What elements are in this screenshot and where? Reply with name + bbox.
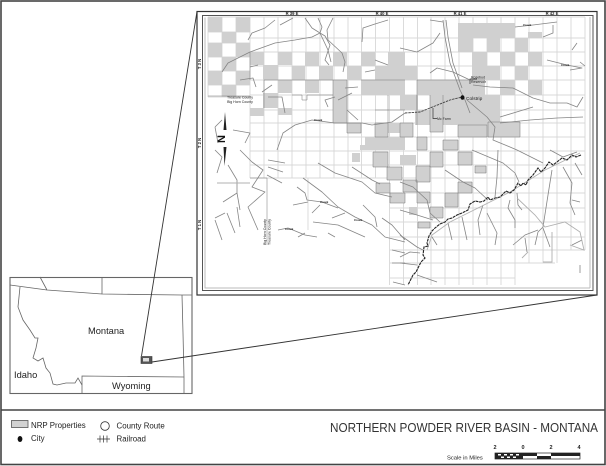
legend: NRP properties [12,420,86,430]
range labels: R 40 E [376,11,389,16]
creek labels: Creek [561,63,570,67]
creek labels: Creek [285,227,294,231]
state borders [10,277,192,393]
city: Colstrip [460,95,483,102]
township labels: T 3 N [197,59,202,69]
legend: railroad [97,434,146,444]
county boundary label: Big Horn County [227,100,253,104]
panel: Montana locator map [10,277,192,394]
label: Rosebud Reservoir [470,76,487,84]
township labels: T 2 N [197,138,202,148]
label: McClure [433,108,451,121]
label: Montana: Montana [88,326,125,336]
township labels [197,59,202,230]
legend: NRP properties: NRP Properties [31,421,86,430]
creek labels: Creek [354,218,363,222]
range labels: R 41 E [454,11,467,16]
legend [12,420,165,444]
creek labels [285,23,570,231]
label: Wyoming: Wyoming [112,381,151,391]
Powder River [408,155,581,285]
creek labels: Creek [523,23,532,27]
label: Rosebud Reservoir: Reservoir [471,80,487,84]
study area marker [141,356,152,364]
NRP property parcels, checkerboard [208,17,542,228]
rotated county boundary label: Big Horn County [263,219,267,245]
legend: railroad: Railroad [116,434,146,444]
light road lines [217,153,584,262]
label: Rosebud Reservoir: Rosebud [471,76,485,80]
scale bar: 4 [577,445,581,451]
range labels [286,11,559,16]
icon: north arrow: N [216,135,228,143]
township grid [208,17,585,285]
scale bar [447,445,581,462]
label: Idaho: Idaho [14,370,37,380]
scale bar: 2 [549,445,553,451]
creek labels: Creek [320,200,329,204]
scale bar: 0 [521,445,525,451]
creek labels: Creek [314,118,323,122]
railroad to Colstrip [405,97,462,113]
range labels: R 39 E [286,11,299,16]
legend: city [18,434,45,443]
scale bar: 2 [493,445,497,451]
city: Colstrip: Colstrip [466,96,483,102]
parcel outlines [208,52,520,245]
county boundary label: Treasure County [227,96,253,100]
label: McClure: Mc Farm [437,117,451,121]
leader lines to main map [142,12,597,362]
creeks and tributaries [215,18,585,285]
panel: main basin map [197,11,597,295]
township labels: T 1 N [197,220,202,230]
scale bar: Scale in Miles [447,456,483,462]
icon: north arrow [216,112,228,166]
county boundary label [227,96,253,104]
rotated county boundary label: Treasure County [268,219,272,245]
range labels: R 42 E [546,11,559,16]
legend: city: City [31,434,45,443]
legend: county route: County Route [116,422,165,430]
